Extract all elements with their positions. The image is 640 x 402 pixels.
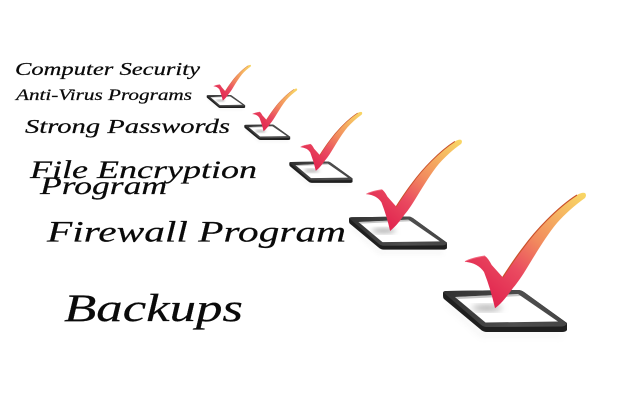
label: File Encryption Program: Program — [39, 173, 167, 200]
label: File Encryption Program: File Encryption — [29, 157, 257, 184]
label: Strong Passwords: Strong Passwords — [25, 116, 230, 138]
icon: checked box 1 — [207, 65, 251, 109]
label: Firewall Program: Firewall Program — [46, 216, 346, 248]
label: File Encryption Program — [29, 157, 257, 200]
icon: checked box 5 — [443, 193, 586, 335]
icon: checked box 4 — [349, 140, 462, 252]
icon: checked box 2 — [244, 89, 297, 141]
label: Computer Security: Computer Security — [15, 59, 200, 79]
label: Backups: Backups — [64, 287, 243, 330]
icon: checked box 3 — [289, 112, 362, 184]
label: Anti-Virus Programs: Anti-Virus Programs — [15, 87, 192, 104]
